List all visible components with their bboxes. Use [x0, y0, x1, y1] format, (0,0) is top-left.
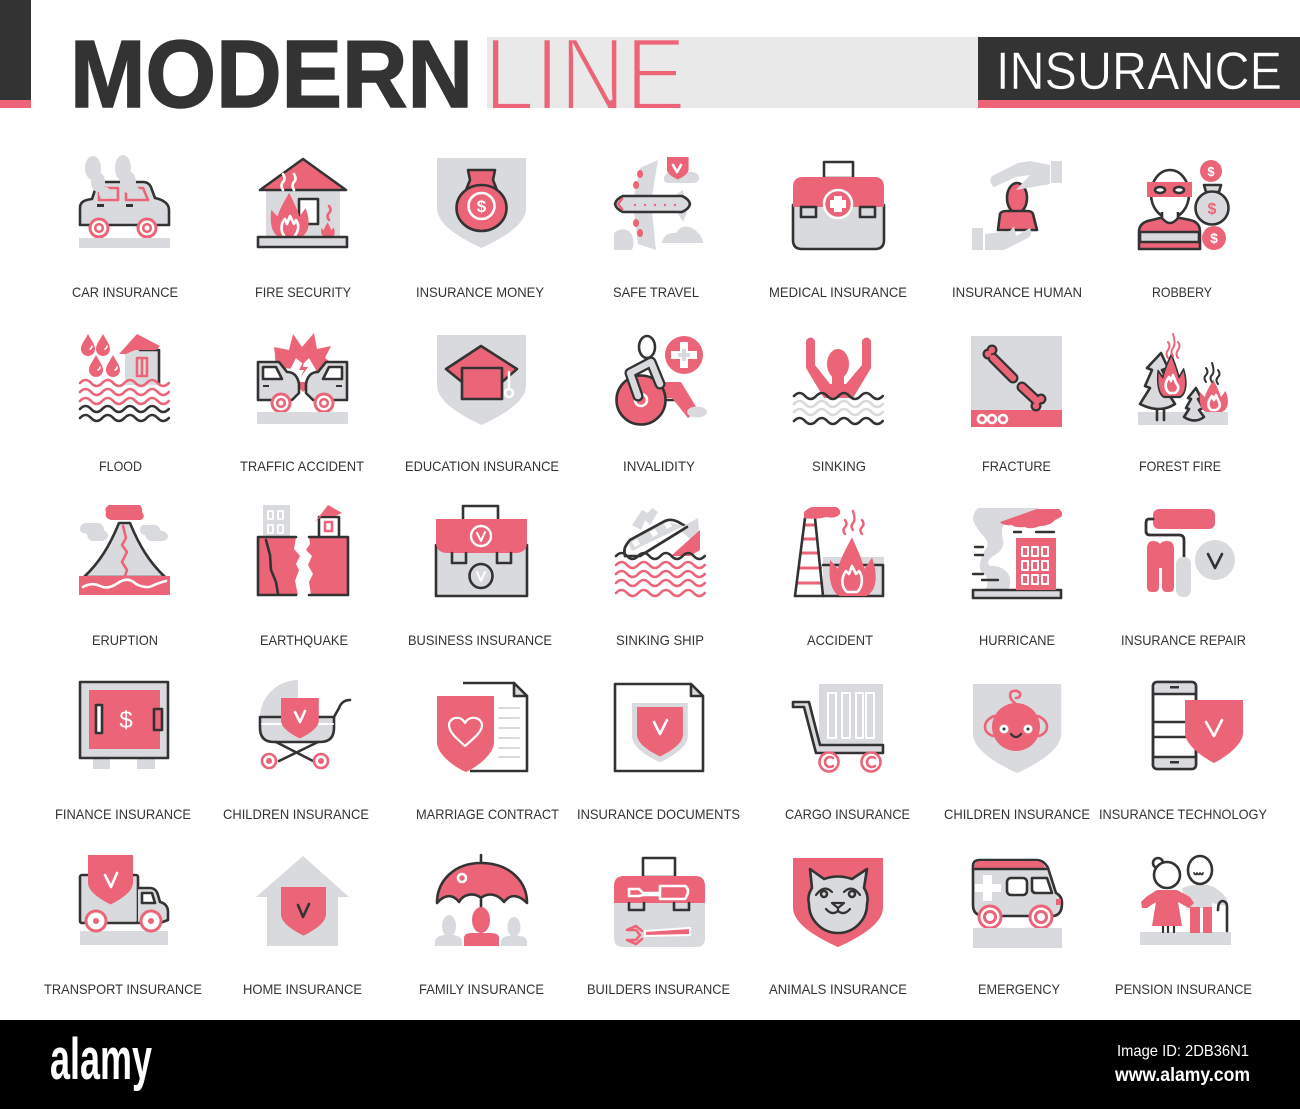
labels: row 3: [92, 632, 1246, 648]
labels: row 3: SINKING SHIP: [616, 632, 704, 648]
footer bar: [0, 1020, 1300, 1109]
labels: row 3: ACCIDENT: [807, 632, 873, 648]
labels: row 4: FINANCE INSURANCE: [55, 806, 191, 822]
labels: row 4: CARGO INSURANCE: [785, 806, 910, 822]
icon: builders insurance: [614, 858, 705, 947]
labels: row 1: CAR INSURANCE: [72, 284, 178, 300]
labels: row 2: FOREST FIRE: [1139, 458, 1221, 474]
labels: row 3: ERUPTION: [92, 632, 158, 648]
labels: row 2: EDUCATION INSURANCE: [405, 458, 559, 474]
footer url: www.alamy.com: [1114, 1065, 1250, 1086]
icon: invalidity: [616, 336, 707, 424]
title: line: LINE: [484, 17, 686, 133]
icon: forest fire: [1138, 334, 1228, 425]
icon: sinking ship: [616, 508, 705, 596]
icon: business insurance: [436, 506, 527, 596]
labels: row 2: FLOOD: [99, 458, 142, 474]
icon: cargo insurance: [793, 684, 883, 772]
labels: row 2: SINKING: [812, 458, 866, 474]
icon: flood: [80, 334, 169, 421]
labels: row 5: BUILDERS INSURANCE: [587, 981, 730, 997]
labels: row 4: CHILDREN INSURANCE: [223, 806, 369, 822]
icon: safe travel: [614, 157, 703, 250]
labels: row 2: TRAFFIC ACCIDENT: [240, 458, 364, 474]
icon: earthquake: [258, 505, 348, 595]
footer image id: Image ID: 2DB36N1: [1117, 1043, 1249, 1060]
labels: row 1: SAFE TRAVEL: [613, 284, 699, 300]
icon: fire security: [258, 159, 347, 247]
icon: finance insurance: [80, 682, 168, 769]
icon: robbery: $: [1210, 230, 1218, 246]
icon: finance insurance: $: [119, 707, 133, 734]
icon: insurance money: $: [477, 197, 487, 216]
icon: family insurance: [435, 855, 527, 946]
icon: transport insurance: [80, 855, 168, 945]
icon: medical insurance: [793, 162, 884, 249]
icon: insurance repair: [1146, 509, 1235, 597]
labels: row 1: INSURANCE MONEY: [416, 284, 545, 300]
labels: row 1: ROBBERY: [1152, 284, 1213, 300]
icon: robbery: [1139, 160, 1228, 250]
icon: emergency: [973, 860, 1062, 948]
icon: children insurance stroller: [260, 680, 350, 768]
title: modern: MODERN: [70, 21, 473, 128]
icon: eruption: [79, 505, 170, 595]
labels: row 5: EMERGENCY: [978, 981, 1061, 997]
labels: row 4: [55, 806, 1268, 822]
labels: row 1: FIRE SECURITY: [255, 284, 352, 300]
icon: education insurance: [437, 335, 526, 425]
labels: row 1: MEDICAL INSURANCE: [769, 284, 907, 300]
labels: row 5: ANIMALS INSURANCE: [769, 981, 907, 997]
labels: row 1: INSURANCE HUMAN: [952, 284, 1082, 300]
labels: row 5: TRANSPORT INSURANCE: [44, 981, 202, 997]
icon: car insurance: [79, 155, 170, 248]
icon: insurance technology: [1153, 682, 1243, 769]
labels: row 4: CHILDREN INSURANCE: [944, 806, 1090, 822]
labels: row 2: [99, 458, 1221, 474]
icon: insurance money: [437, 158, 526, 248]
header band: [0, 0, 1300, 108]
footer logo: alamy: alamy: [50, 1027, 152, 1092]
labels: row 4: INSURANCE TECHNOLOGY: [1099, 806, 1268, 822]
icon: fracture: [971, 336, 1062, 427]
labels: row 3: INSURANCE REPAIR: [1121, 632, 1246, 648]
labels: row 1: [72, 284, 1213, 300]
labels: row 2: INVALIDITY: [623, 458, 696, 474]
labels: row 4: MARRIAGE CONTRACT: [416, 806, 559, 822]
labels: row 3: HURRICANE: [979, 632, 1055, 648]
icon: hurricane: [973, 508, 1062, 598]
icon: accident: [795, 507, 884, 596]
labels: row 5: HOME INSURANCE: [243, 981, 362, 997]
labels: row 5: FAMILY INSURANCE: [419, 981, 544, 997]
icon: traffic accident: [257, 333, 348, 424]
labels: row 5: PENSION INSURANCE: [1115, 981, 1252, 997]
icon: children insurance baby: [973, 684, 1061, 773]
icon: robbery: $: [1208, 201, 1217, 218]
icon: sinking: [794, 338, 883, 424]
labels: row 4: INSURANCE DOCUMENTS: [577, 806, 740, 822]
icon: marriage contract: [437, 683, 527, 772]
icon: insurance documents: [615, 684, 703, 771]
icon: pension insurance: [1140, 856, 1231, 945]
labels: row 2: FRACTURE: [982, 458, 1051, 474]
labels: row 3: BUSINESS INSURANCE: [408, 632, 552, 648]
labels: row 5: [44, 981, 1252, 997]
icon: home insurance: [256, 856, 349, 946]
icon: animals insurance: [793, 858, 883, 947]
labels: row 3: EARTHQUAKE: [260, 632, 348, 648]
icon: insurance human: [972, 161, 1062, 250]
title: insurance: INSURANCE: [996, 42, 1282, 101]
icon: robbery: $: [1207, 164, 1215, 179]
